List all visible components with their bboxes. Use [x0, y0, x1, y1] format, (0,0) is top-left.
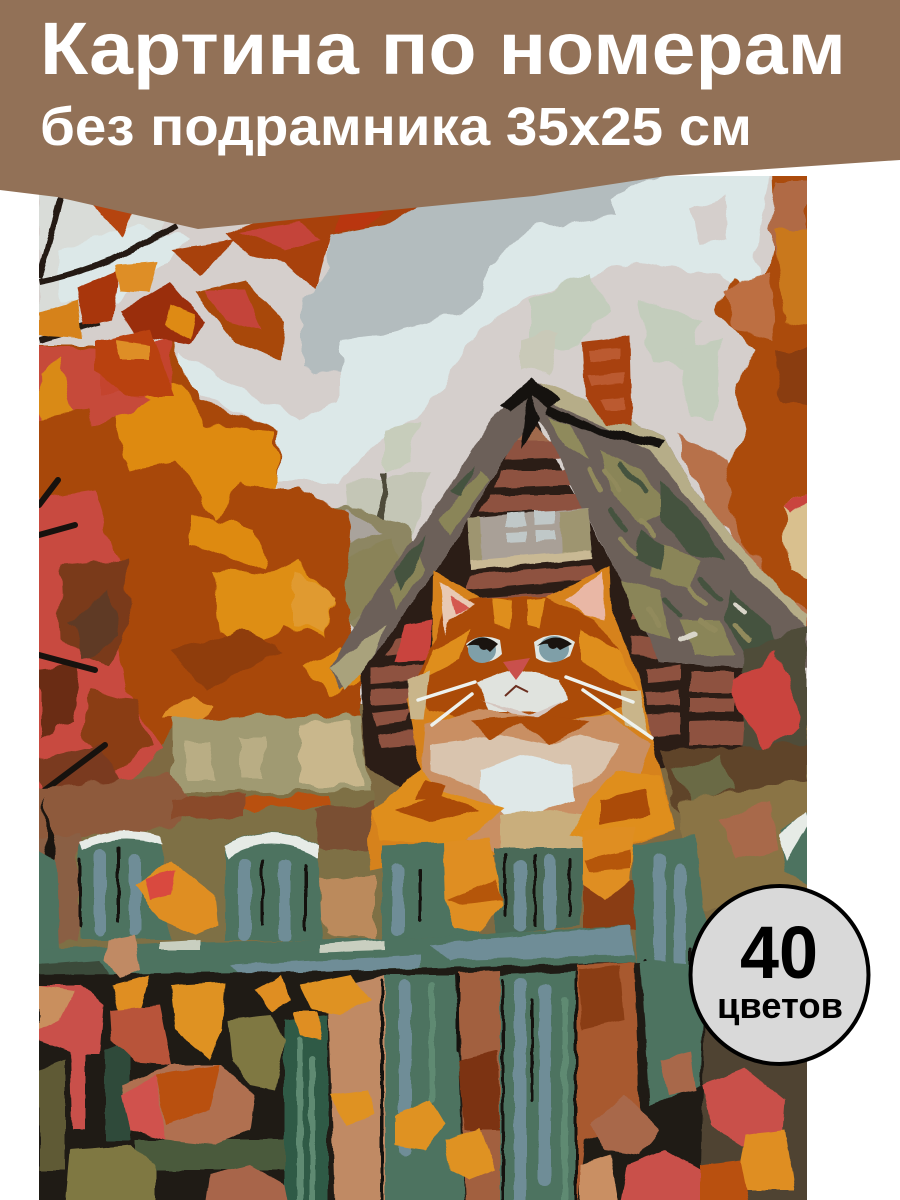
cat paws — [443, 836, 634, 932]
badge: 40 colours: цветов — [717, 985, 843, 1026]
yard and background fence — [30, 715, 400, 950]
lower post bark — [300, 975, 576, 1200]
left tree branches — [39, 477, 108, 789]
background trees — [334, 504, 412, 628]
chimney — [582, 336, 632, 426]
post bark — [78, 846, 692, 965]
lower fence — [30, 960, 815, 1200]
painting: cat on a fence — [39, 176, 807, 1200]
dormer window — [468, 508, 592, 570]
foreground leaves — [39, 860, 795, 1200]
sky and clouds — [39, 176, 807, 964]
fence posts — [39, 812, 807, 964]
red bush and ground right — [660, 625, 815, 910]
cat face — [418, 635, 652, 738]
subtitle: без подрамника 35х25 см — [40, 97, 752, 157]
badge: 40 colours: 40 — [740, 911, 818, 994]
house walls — [360, 417, 760, 800]
right autumn tree — [677, 170, 815, 640]
roof dabs — [590, 465, 750, 640]
left orange tree — [30, 340, 365, 815]
cat body — [368, 566, 675, 870]
banner — [0, 0, 900, 229]
badge: 40 colours — [690, 886, 868, 1064]
roof — [330, 378, 807, 690]
horizontal rail — [39, 924, 636, 975]
title: Картина по номерам — [40, 7, 846, 90]
top branches and leaves — [39, 195, 420, 396]
